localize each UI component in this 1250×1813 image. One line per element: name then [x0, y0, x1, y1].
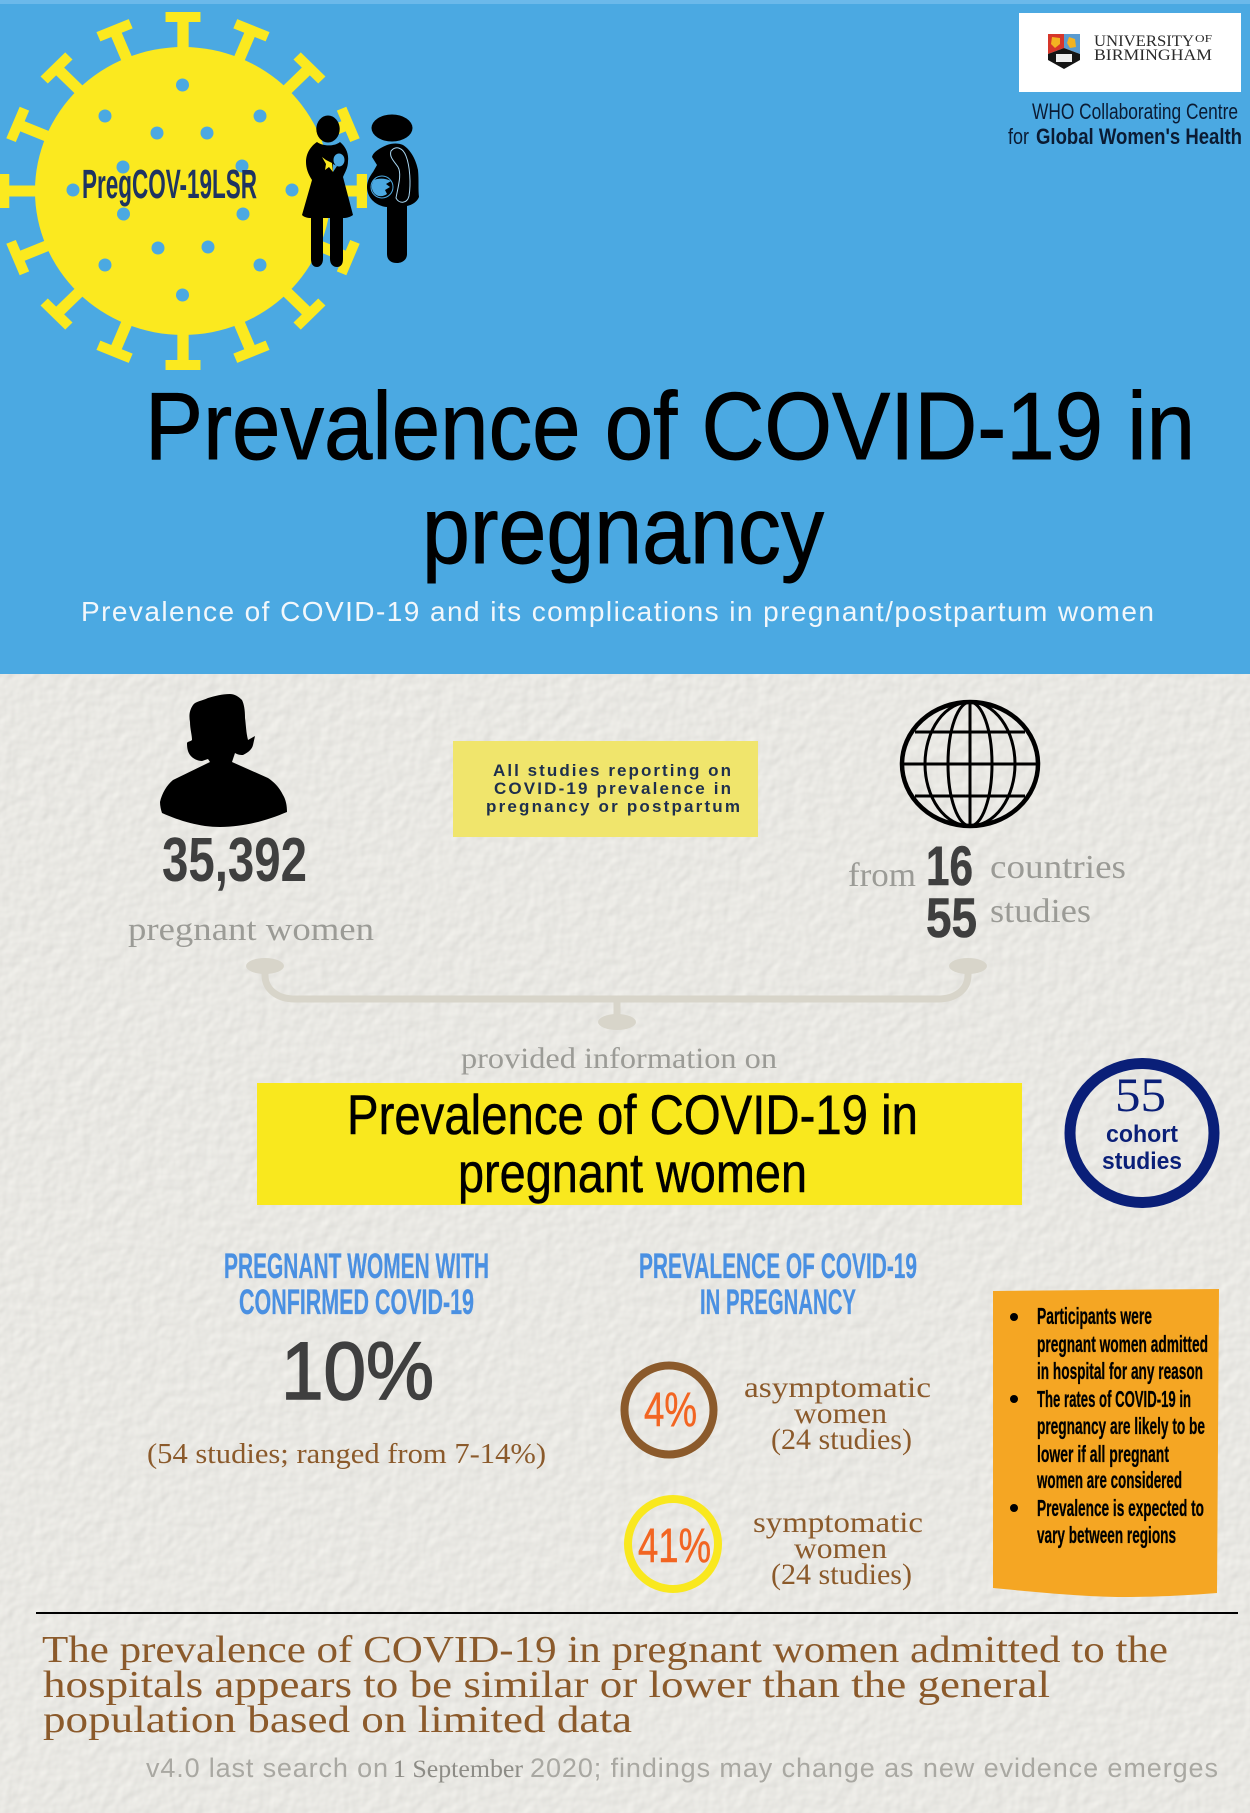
badge: 4% asymptomatic [624, 1366, 714, 1454]
badge: 55 cohort studies: cohort [1106, 1121, 1178, 1148]
panel: orange notes: lower if all pregnant [1037, 1441, 1169, 1467]
panel: blue header [0, 0, 1250, 674]
conclusion text: The prevalence of COVID-19 in pregnant women admitted to the [42, 1629, 1168, 1671]
heading: prevalence of COVID-19 in pregnancy: IN PREGNANCY [700, 1283, 856, 1322]
callout: all studies: All studies reporting on [493, 761, 731, 780]
text: pregnant women: pregnant women [128, 912, 374, 948]
conclusion text [42, 1629, 1168, 1741]
title: pregnancy [422, 477, 824, 584]
text: from 16 countries, 55 studies [848, 834, 1126, 949]
panel: orange notes: Participants were [1037, 1303, 1152, 1329]
icon: woman silhouette [160, 694, 287, 827]
text: from 16 countries, 55 studies: studies [990, 893, 1091, 930]
banner: prevalence in pregnant women [257, 1083, 1022, 1205]
icon: university crest [1048, 34, 1080, 69]
text: symptomatic women: symptomatic [753, 1506, 923, 1539]
text: asymptomatic women [744, 1371, 931, 1456]
badge: 41% symptomatic: 41% [638, 1520, 711, 1573]
icon: yellow coronavirus [0, 12, 367, 370]
callout: all studies [453, 741, 758, 837]
text: asymptomatic women: asymptomatic [744, 1371, 931, 1404]
icon: pregnant woman with fetus [367, 114, 419, 263]
subtitle: Prevalence of COVID-19 and its complications in pregnant/postpartum women [81, 596, 1154, 627]
footer version note: v4.0 last search on [146, 1753, 388, 1783]
footer version note: 2020; findings may change as new evidence emerges [530, 1753, 1218, 1783]
heading: pregnant women with confirmed COVID-19: PREGNANT WOMEN WITH [224, 1247, 489, 1286]
text: 54 studies range: (54 studies; ranged from 7-14%) [147, 1438, 546, 1470]
arrow: connector bracket [246, 958, 987, 1030]
heading: pregnant women with confirmed COVID-19: CONFIRMED COVID-19 [239, 1283, 474, 1322]
label: PregCOV-19LSR: PregCOV-19LSR [82, 161, 257, 207]
badge: 55 cohort studies: 55 [1115, 1069, 1166, 1122]
stat: 35,392: 35,392 [162, 826, 307, 895]
text: asymptomatic women: (24 studies) [771, 1423, 912, 1456]
footer version note [146, 1753, 1218, 1783]
text: WHO collaborating centre: for [1008, 124, 1029, 149]
panel: textured paper background [0, 674, 1250, 1813]
badge: 4% asymptomatic: 4% [644, 1384, 697, 1437]
callout: all studies: pregnancy or postpartum [486, 797, 740, 816]
badge: 55 cohort studies [1070, 1064, 1214, 1202]
banner: prevalence in pregnant women: pregnant women [458, 1141, 807, 1204]
heading: pregnant women with confirmed COVID-19 [224, 1247, 489, 1322]
text: asymptomatic women: women [794, 1397, 887, 1430]
text: symptomatic women [753, 1506, 923, 1591]
text: from 16 countries, 55 studies: from [848, 857, 916, 894]
conclusion text: population based on limited data [43, 1699, 632, 1741]
text: provided information on: provided information on [461, 1042, 777, 1075]
heading: prevalence of COVID-19 in pregnancy: PREVALENCE OF COVID-19 [639, 1247, 917, 1286]
footer version note: 1 September [393, 1756, 524, 1783]
stat: 10%: 10% [281, 1326, 434, 1417]
conclusion text: hospitals appears to be similar or lower than the general [43, 1664, 1050, 1706]
text: from 16 countries, 55 studies: countries [990, 849, 1126, 886]
panel: orange notes [993, 1289, 1219, 1597]
logo: University of Birmingham: BIRMINGHAM [1094, 47, 1212, 64]
heading: prevalence of COVID-19 in pregnancy [639, 1247, 917, 1322]
badge: 41% symptomatic [628, 1499, 718, 1589]
text: from 16 countries, 55 studies: 55 [926, 886, 977, 949]
callout: all studies: COVID-19 prevalence in [494, 779, 731, 798]
text: symptomatic women: (24 studies) [771, 1558, 912, 1591]
title [145, 373, 1195, 584]
icon: mother holding baby [302, 116, 353, 267]
logo: University of Birmingham: UNIVERSITY [1094, 33, 1194, 50]
text: WHO collaborating centre [1008, 99, 1242, 149]
logo: University of Birmingham: OF [1195, 34, 1213, 45]
banner: prevalence in pregnant women: Prevalence of COVID-19 in [347, 1083, 918, 1146]
badge: 55 cohort studies: studies [1102, 1148, 1182, 1175]
icon: globe [902, 702, 1038, 826]
text: symptomatic women: women [794, 1532, 887, 1565]
text: from 16 countries, 55 studies: 16 [926, 834, 973, 897]
logo: University of Birmingham [1019, 13, 1241, 92]
